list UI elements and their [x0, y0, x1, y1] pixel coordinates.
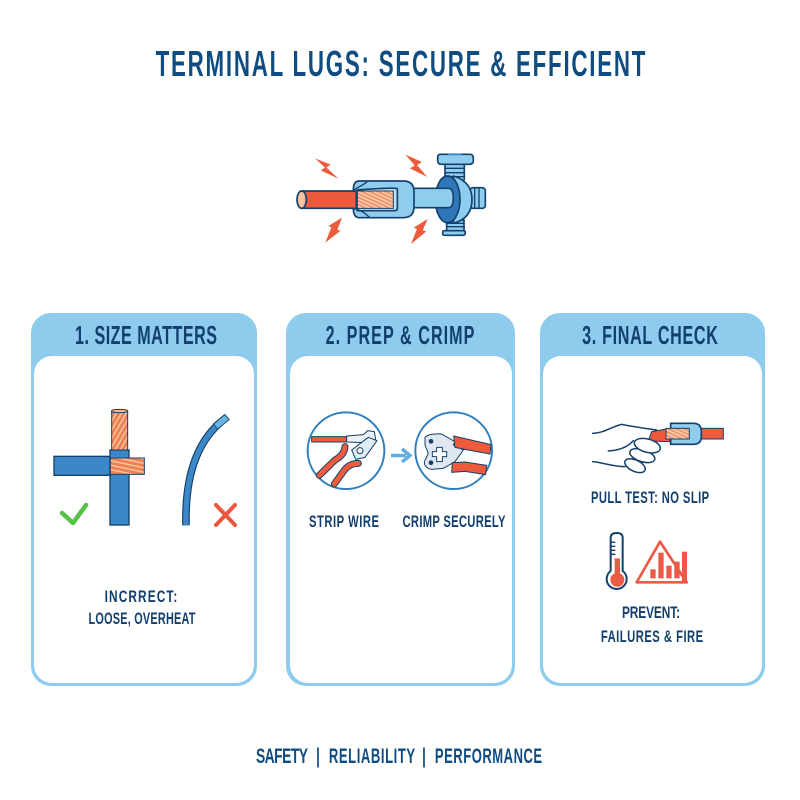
icon: red cross [216, 505, 235, 525]
footer tagline [256, 744, 542, 768]
hero illustration: terminal lug with wire and sparks [297, 153, 485, 244]
panel frame [287, 314, 514, 685]
captions [309, 513, 506, 532]
caption: prevent [601, 604, 703, 647]
heading: 1. SIZE MATTERS [75, 320, 217, 350]
panel: final check [541, 314, 764, 685]
icon: crimper in circle [415, 412, 492, 489]
correct fit diagram [54, 409, 144, 525]
arrow [391, 449, 410, 462]
caption: INCRRECT: [105, 588, 177, 607]
caption: LOOSE, OVERHEAT [89, 609, 196, 628]
icon: wire stripper in circle [308, 412, 384, 489]
captions: STRIP WIRE [309, 513, 379, 532]
icon: hand pull test [593, 423, 723, 475]
sparks [315, 155, 428, 244]
caption: prevent: FAILURES & FIRE [601, 628, 703, 647]
icon: green check [62, 505, 86, 523]
panel: size matters [32, 314, 256, 685]
footer tagline: | [421, 745, 427, 768]
footer tagline: RELIABILITY [329, 744, 415, 768]
heading: 2. PREP & CRIMP [326, 320, 474, 350]
icon: warning triangle with bars [637, 542, 687, 582]
panel frame [32, 314, 256, 685]
lug shaft and barrel [353, 181, 453, 218]
stripped copper [353, 182, 397, 217]
caption [89, 588, 196, 628]
bolt and nut [435, 153, 485, 235]
incorrect bent wire diagram [186, 417, 227, 525]
icon: thermometer [607, 533, 627, 589]
caption: pull test: PULL TEST: NO SLIP [591, 489, 709, 508]
footer tagline: PERFORMANCE [435, 744, 542, 768]
wire [297, 191, 356, 208]
captions: CRIMP SECURELY [403, 513, 506, 532]
panel frame [541, 314, 764, 685]
heading: 3. FINAL CHECK [582, 320, 718, 350]
title: TERMINAL LUGS: SECURE & EFFICIENT [156, 45, 645, 84]
caption: prevent: PREVENT: [622, 604, 680, 623]
footer tagline: | [315, 745, 321, 768]
panel: prep and crimp [287, 314, 514, 685]
footer tagline: SAFETY [256, 744, 308, 768]
